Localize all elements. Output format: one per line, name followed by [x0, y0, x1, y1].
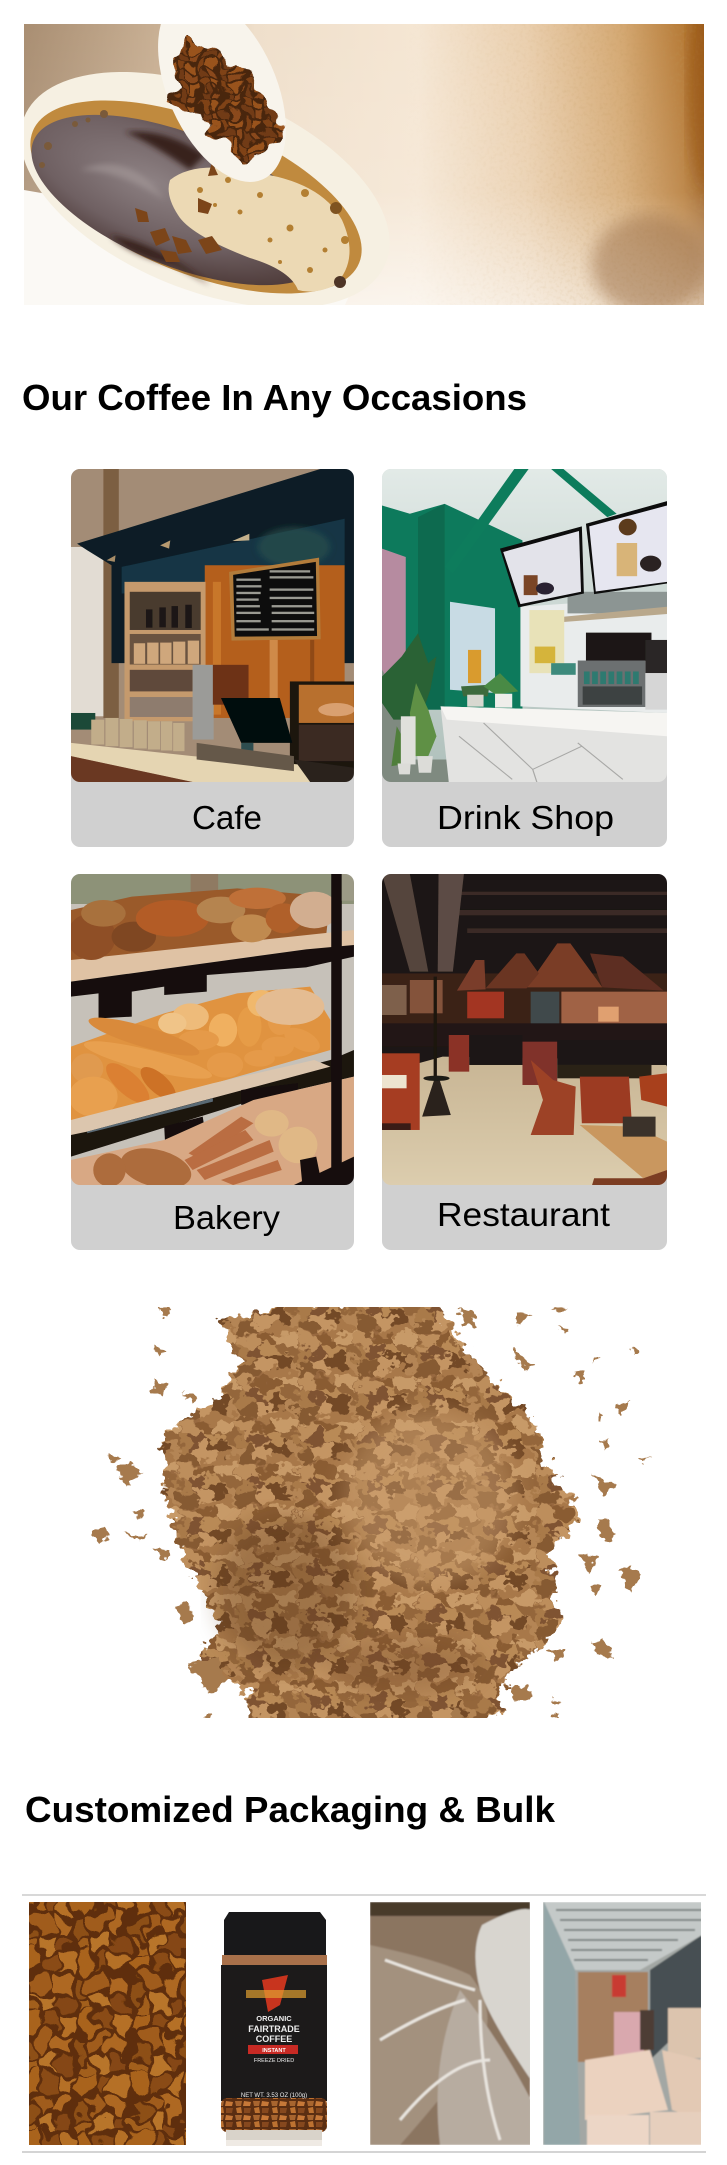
jar label text	[241, 2014, 307, 2099]
jar label text: INSTANT	[262, 2048, 286, 2054]
panel: restaurant	[382, 874, 667, 1250]
label: Drink Shop: Drink Shop	[437, 799, 614, 836]
crema bubbles	[39, 110, 108, 168]
main mound	[163, 1300, 581, 1729]
pile of instant coffee granules	[92, 1300, 650, 1729]
photo: bulk bag in carton	[370, 1902, 531, 2145]
photo: cafe counter	[71, 469, 355, 782]
photo: shipping container being loaded	[543, 1902, 702, 2145]
photo: drink shop interior	[382, 469, 667, 782]
label bar	[71, 469, 354, 847]
label: Bakery: Bakery	[173, 1199, 281, 1236]
panel: packaging strip	[20, 1890, 706, 2165]
cup body	[24, 72, 380, 305]
granules in spoon	[168, 40, 283, 168]
label: Restaurant: Restaurant	[437, 1196, 610, 1233]
panel: drink shop	[382, 469, 667, 847]
jar label text: ORGANIC	[256, 2014, 292, 2023]
brand bird logo	[262, 1975, 288, 2012]
label: Cafe: Cafe	[192, 799, 262, 836]
jar label text: NET WT. 3.53 OZ (100g)	[241, 2093, 307, 2099]
heading: Customized Packaging & Bulk: Customized Packaging & Bulk	[25, 1789, 556, 1830]
light and shadow across the mound	[215, 1411, 517, 1695]
photo: coffee jar	[221, 1912, 327, 2146]
photo: bakery display	[67, 874, 354, 1196]
photo: coffee granules close-up	[29, 1902, 186, 2145]
jar label text: FREEZE DRIED	[254, 2058, 294, 2064]
coffee surface	[30, 100, 362, 294]
label bar	[382, 874, 667, 1250]
falling granules	[135, 162, 222, 262]
foam bubbles	[197, 177, 349, 288]
label bar	[71, 874, 354, 1250]
photo: restaurant interior	[382, 874, 667, 1185]
panel: cafe	[71, 469, 355, 847]
hero photo: coffee cup and spoon of granules	[24, 24, 704, 305]
panel: bakery	[67, 874, 354, 1250]
label bar	[382, 469, 667, 847]
jar label text: FAIRTRADE	[248, 2024, 300, 2034]
foam	[169, 168, 350, 292]
jar label text: COFFEE	[256, 2034, 292, 2044]
spoon	[158, 24, 286, 182]
strip frame	[22, 1894, 706, 2153]
scattered loose granules	[92, 1308, 650, 1719]
heading: Our Coffee In Any Occasions: Our Coffee In Any Occasions	[22, 377, 527, 418]
